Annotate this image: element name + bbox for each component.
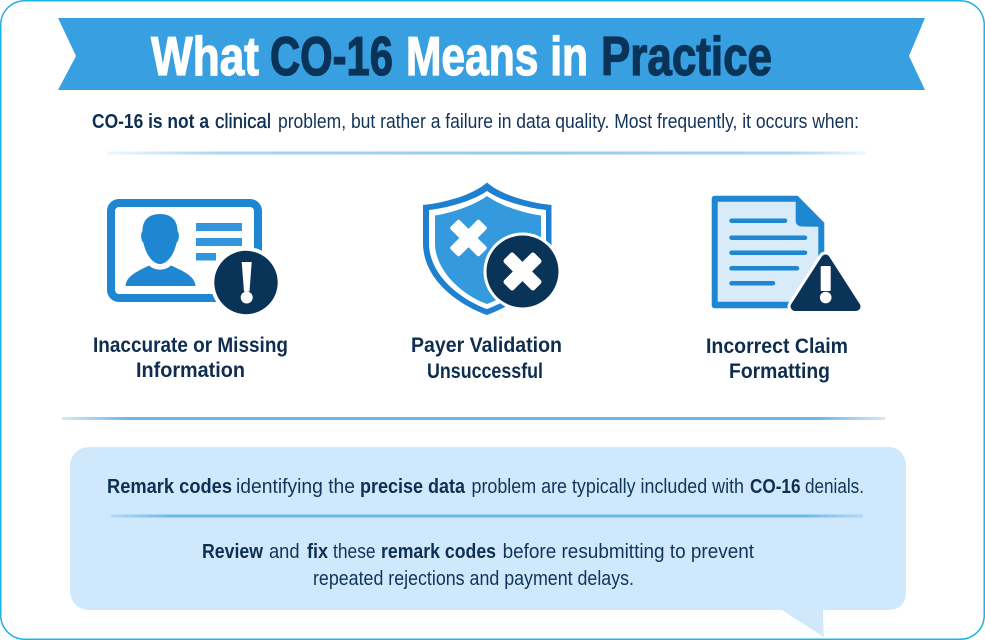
title: Practice xyxy=(601,25,772,87)
icon: document with warning xyxy=(712,196,856,308)
label: Formatting xyxy=(729,360,830,383)
intro sentence: clinical xyxy=(215,111,271,133)
icon: ID card with alert xyxy=(111,203,282,318)
label: Unsuccessful xyxy=(427,360,543,383)
item: inaccurate or missing information xyxy=(93,203,288,382)
title banner xyxy=(58,18,925,90)
label: Information xyxy=(136,359,245,382)
label: Incorrect Claim xyxy=(706,335,848,358)
label xyxy=(93,334,288,382)
speech bubble xyxy=(70,447,906,637)
review and fix sentence: repeated rejections and payment delays. xyxy=(313,568,634,590)
intro sentence xyxy=(92,111,859,133)
review and fix sentence: remark codes xyxy=(381,541,496,563)
remark codes sentence: problem are typically included with xyxy=(472,476,744,498)
remark codes sentence: precise data xyxy=(360,476,466,498)
remark codes sentence: denials. xyxy=(805,476,864,498)
item: payer validation unsuccessful xyxy=(411,182,562,383)
review and fix sentence: these xyxy=(333,541,376,563)
review and fix sentence: Review xyxy=(202,541,263,563)
icon: shield with x xyxy=(423,182,562,315)
banner ribbon xyxy=(58,18,925,90)
title xyxy=(151,25,772,87)
remark codes sentence: CO-16 xyxy=(750,476,800,498)
review and fix sentence xyxy=(202,541,754,590)
title: Means in xyxy=(406,25,588,87)
item: incorrect claim formatting xyxy=(706,196,856,383)
remark codes sentence xyxy=(107,476,864,498)
remark codes sentence: Remark codes xyxy=(107,476,232,498)
intro sentence: problem, but rather a failure in data quality. Most frequently, it occurs when: xyxy=(278,111,859,133)
label: Payer Validation xyxy=(411,334,562,357)
intro sentence: CO-16 is not a xyxy=(92,111,210,133)
callout panel xyxy=(70,447,906,637)
title: What xyxy=(151,25,259,87)
review and fix sentence: before resubmitting to prevent xyxy=(503,541,754,563)
label xyxy=(706,335,848,383)
review and fix sentence: and xyxy=(269,541,300,563)
label xyxy=(411,334,562,383)
title: CO-16 xyxy=(270,25,393,87)
remark codes sentence: identifying the xyxy=(236,476,355,498)
review and fix sentence: fix xyxy=(307,541,328,563)
label: Inaccurate or Missing xyxy=(93,334,288,357)
